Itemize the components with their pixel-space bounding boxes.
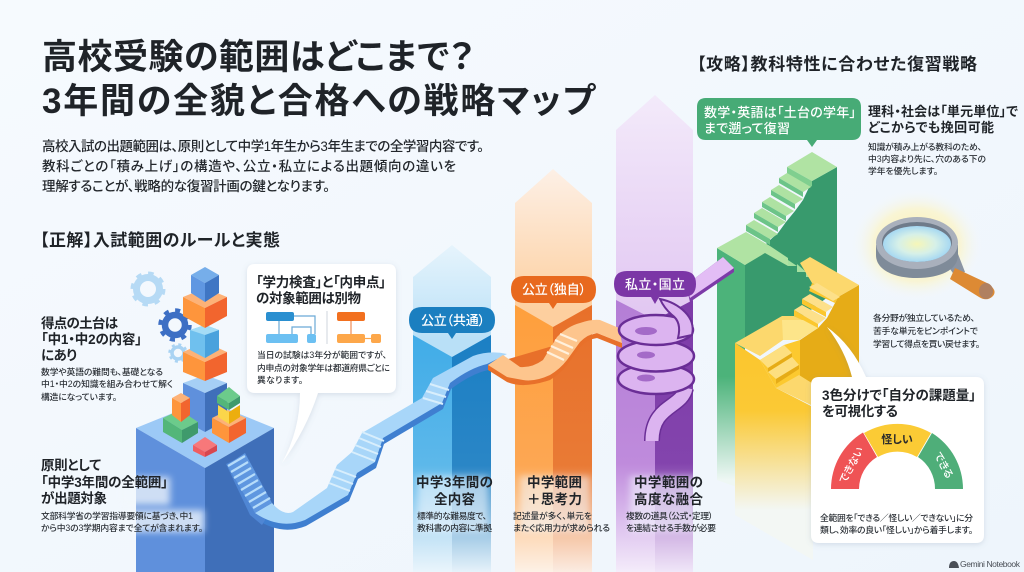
text: independent test: 中学範囲	[527, 474, 582, 490]
text: private test: を連結させる手数が必要	[626, 522, 716, 533]
text: private test: 高度な融合	[634, 491, 704, 507]
intro text: 高校入試の出題範囲は、原則として中学1年生から3年生までの全学習内容です。	[42, 138, 484, 154]
gauge: 怪しい	[881, 433, 913, 446]
label: private and national	[614, 271, 696, 304]
text: science and social studies: 中3内容より先に、穴のある下の	[868, 153, 986, 164]
icon: magnifying glass	[851, 189, 995, 301]
intro text: 理解することが、戦略的な復習計画の鍵となります。	[42, 178, 330, 194]
text: private test: 複数の道具（公式・定理）	[626, 510, 713, 521]
small blocks	[163, 387, 246, 457]
callout: math and english: まで遡って復習	[704, 121, 790, 136]
text: independent units: 苦手な単元をピンポイントで	[873, 325, 979, 336]
callout: color coding gauge: 3色分けで「自分の課題量」	[822, 387, 976, 403]
text: science and social studies: どこからでも挽回可能	[868, 120, 994, 135]
intro text	[42, 138, 484, 194]
callout: math and english	[697, 98, 861, 147]
callout: color coding gauge: を可視化する	[822, 403, 898, 419]
text halo backdrop	[120, 476, 696, 532]
callout: exam vs transcript: 「学力検査」と「内申点」	[256, 274, 386, 290]
gear icons	[132, 274, 190, 362]
text: science and social studies: 学年を優先します。	[868, 165, 938, 176]
label: public independent	[511, 276, 596, 309]
yellow staircase	[735, 257, 859, 560]
orange ribbon	[488, 320, 622, 385]
intro text: 教科ごとの「積み上げ」の構造や、公立・私立による出題傾向の違いを	[42, 158, 456, 174]
text: common test: 中学3年間の	[416, 474, 493, 490]
text: common test: 教科書の内容に準拠	[417, 522, 492, 533]
text: full range note	[41, 458, 203, 533]
text: foundation note	[41, 315, 173, 402]
tall stack	[183, 267, 227, 432]
flow diagram	[266, 311, 381, 344]
callout: exam vs transcript: 当日の試験は3年分が範囲ですが、	[257, 349, 387, 360]
title	[42, 38, 597, 121]
text: common test	[416, 474, 493, 533]
central pillar with blocks	[132, 267, 274, 572]
text: science and social studies	[868, 104, 1019, 176]
blue stair ribbon	[226, 352, 507, 530]
text: foundation note: にあり	[41, 348, 77, 363]
purple spiral	[618, 257, 734, 441]
heading: strategy: 【攻略】教科特性に合わせた復習戦略	[697, 54, 977, 74]
column: private and national	[616, 95, 693, 572]
text: independent units	[873, 312, 980, 349]
column: public independent	[515, 169, 592, 572]
text: science and social studies: 知識が積み上がる教科のため、	[868, 141, 982, 152]
text: independent test: またぐ応用力が求められる	[513, 522, 610, 533]
callout: color coding gauge: 類し、効率の良い「怪しい」から着手します。	[820, 524, 973, 535]
text: foundation note: 構造になっています。	[41, 391, 117, 402]
text: private test: 中学範囲の	[634, 474, 703, 490]
label: public common: 公立（共通）	[421, 313, 485, 328]
text: full range note: 原則として	[41, 458, 101, 473]
text: independent test: ＋思考力	[527, 492, 582, 507]
text: science and social studies: 理科・社会は「単元単位」で	[868, 104, 1019, 119]
text: independent test: 記述量が多く、単元を	[513, 510, 592, 521]
text: full range note: 文部科学省の学習指導要領に基づき、中1	[41, 510, 193, 521]
text: full range note: から中3の3学期内容まで全てが含まれます。	[41, 522, 203, 533]
callout: exam vs transcript: 内申点の対象学年は都道府県ごとに	[257, 362, 390, 373]
text: foundation note: 得点の土台は	[41, 315, 119, 331]
callout: math and english: 数学・英語は「土台の学年」	[704, 105, 856, 120]
label: private and national: 私立・国立	[625, 277, 685, 292]
brand mark: Gemini Notebook	[960, 559, 1021, 569]
pillar	[136, 400, 274, 572]
label: public independent: 公立（独自）	[522, 282, 586, 297]
gauge: できる	[931, 450, 955, 481]
green staircase	[717, 152, 837, 490]
callout: exam vs transcript: 異なります。	[257, 375, 303, 385]
text: independent units: 各分野が独立しているため、	[873, 312, 975, 323]
label: public common	[409, 307, 495, 339]
text: private test	[626, 474, 716, 533]
text: full range note: が出題対象	[41, 490, 108, 506]
callout: exam vs transcript	[247, 264, 396, 463]
column: public common	[413, 245, 491, 572]
callout: exam vs transcript: の対象範囲は別物	[256, 290, 362, 306]
callout: color coding gauge: 全範囲を「できる／怪しい／できない」に分	[820, 512, 973, 523]
title: 3年間の全貌と合格への戦略マップ	[42, 82, 597, 121]
text: independent units: 学習して得点を買い戻せます。	[873, 338, 980, 349]
text: independent test	[513, 474, 610, 533]
text: foundation note: 数学や英語の難問も、基礎となる	[41, 366, 163, 377]
heading: rules: 【正解】入試範囲のルールと実態	[40, 230, 280, 250]
text: common test: 標準的な難易度で、	[417, 510, 487, 521]
text: common test: 全内容	[434, 491, 476, 507]
callout: color coding gauge	[811, 327, 984, 543]
gauge: できない	[837, 445, 866, 486]
gauge	[831, 424, 963, 489]
title: 高校受験の範囲はどこまで？	[42, 38, 474, 77]
text: full range note: 「中学3年間の全範囲」	[41, 474, 168, 490]
text: foundation note: 「中1・中2の内容」	[41, 331, 142, 347]
text: foundation note: 中1・中2の知識を組み合わせて解く	[41, 378, 173, 389]
